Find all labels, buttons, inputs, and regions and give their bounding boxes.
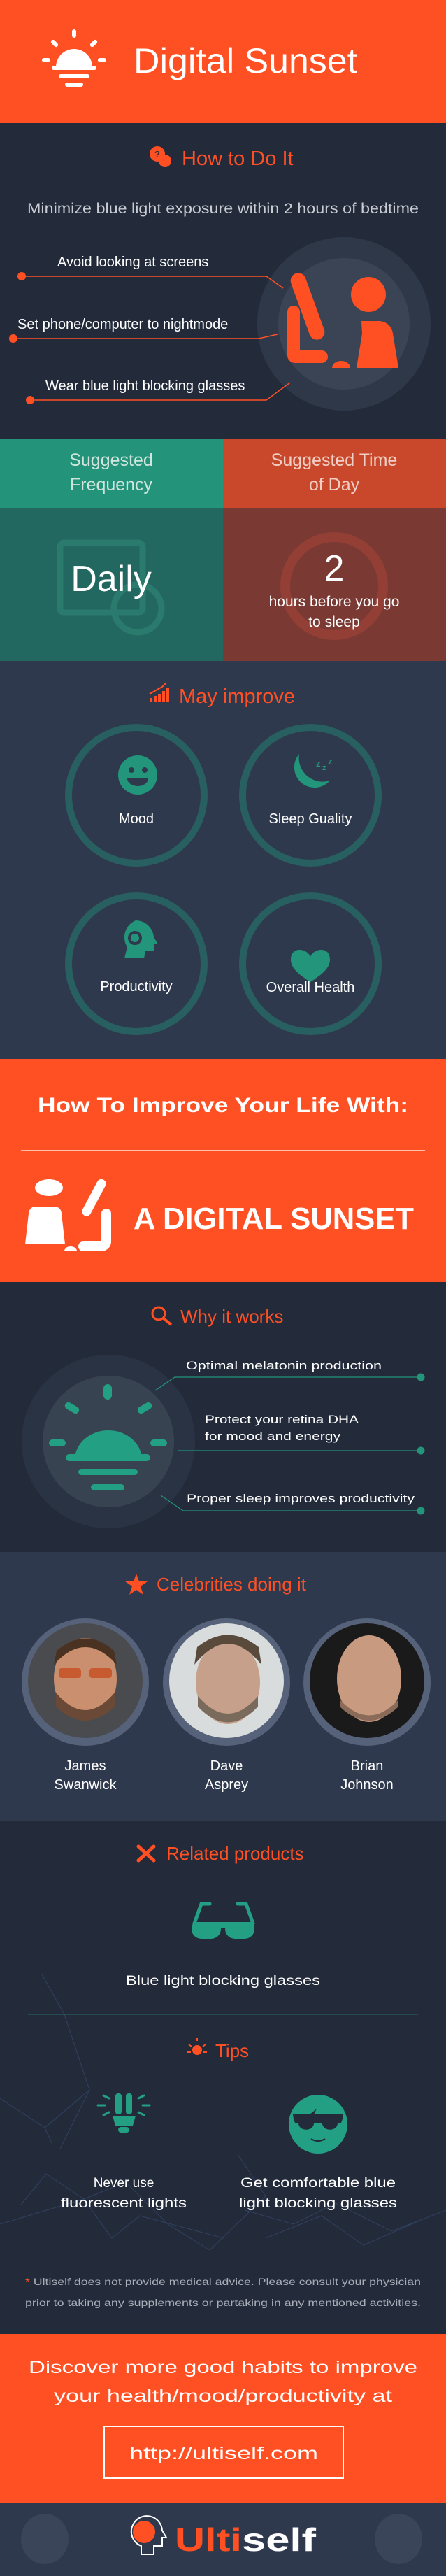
- heading: how to do it: How to Do It: [182, 148, 294, 170]
- url box: http://ultiself.com: [129, 2444, 318, 2463]
- benefit: overall health: Overall Health: [266, 980, 354, 995]
- list items: Wear blue light blocking glasses: [45, 378, 245, 394]
- logo: Ulti: [175, 2521, 242, 2558]
- url box: [104, 2426, 343, 2478]
- heading: celebrities: Celebrities doing it: [157, 1574, 307, 1595]
- celebrity: brian johnson: [303, 1618, 431, 1793]
- panel: suggested time of day: of Day: [309, 475, 360, 494]
- benefit: sleep quality: [243, 727, 378, 863]
- icon: teal sunset circle: [22, 1355, 195, 1528]
- panel: how to improve banner: How To Improve Your Life With:: [38, 1094, 408, 1117]
- panel: how to do it: [0, 123, 446, 439]
- title: Digital Sunset: [134, 41, 357, 80]
- list items: Set phone/computer to nightmode: [17, 317, 228, 332]
- panel: suggested frequency: [0, 439, 223, 661]
- list: reasons: for mood and energy: [205, 1430, 341, 1443]
- list items: Avoid looking at screens: [57, 255, 208, 270]
- benefit: productivity: Productivity: [100, 979, 173, 995]
- list: reasons: Proper sleep improves productivity: [187, 1492, 415, 1505]
- disclaimer: prior to taking any supplements or partaking in any mentioned activities.: [25, 2297, 421, 2308]
- heading: related products: Related products: [166, 1843, 304, 1864]
- celebrity: james swanwick: [22, 1618, 149, 1793]
- product: blue light glasses: Blue light blocking glasses: [126, 1974, 320, 1988]
- background network pattern: [0, 1974, 446, 2250]
- panel: why it works: [0, 1282, 446, 1552]
- tip: never use fluorescent lights: Never use: [94, 2176, 154, 2191]
- benefit: mood: [69, 727, 204, 863]
- celebrity: james swanwick: Swanwick: [55, 1777, 117, 1793]
- list: reasons: [155, 1359, 425, 1515]
- panel: how to improve banner: A DIGITAL SUNSET: [134, 1202, 414, 1236]
- disclaimer: [25, 2276, 421, 2308]
- celebrity: brian johnson: Brian: [351, 1758, 383, 1774]
- benefit: mood: Mood: [119, 811, 154, 827]
- celebrity: dave asprey: [163, 1618, 290, 1793]
- icon: faded clock: [285, 537, 383, 635]
- subtitle: Minimize blue light exposure within 2 hours of bedtime: [27, 201, 419, 217]
- panel: suggested frequency: Daily: [71, 559, 152, 599]
- header banner: [0, 0, 446, 123]
- icon: person and computer white: [25, 1178, 111, 1251]
- panel: how to improve banner: [0, 1059, 446, 1282]
- heading: may improve: May improve: [179, 685, 295, 708]
- benefit: sleep quality: z: [316, 758, 321, 769]
- heading: how to do it: ?: [154, 149, 160, 159]
- footer: [0, 2503, 446, 2576]
- list: reasons: Protect your retina DHA: [205, 1413, 359, 1426]
- benefit: overall health: [243, 896, 378, 1032]
- list items: [9, 255, 290, 404]
- list: reasons: Optimal melatonin production: [186, 1359, 382, 1372]
- panel: celebrities: [0, 1552, 446, 1821]
- panel: suggested frequency: Frequency: [70, 475, 153, 494]
- heading: why it works: Why it works: [180, 1306, 283, 1327]
- panel: suggested time of day: [223, 439, 446, 661]
- benefit: sleep quality: z: [322, 764, 326, 772]
- benefit: sleep quality: Sleep Guality: [269, 811, 352, 827]
- panel: call to action: Discover more good habits to improve: [29, 2358, 417, 2377]
- celebrity: dave asprey: Asprey: [205, 1777, 248, 1793]
- tip: comfortable glasses: light blocking glasses: [239, 2196, 397, 2211]
- tip: never use fluorescent lights: fluorescent lights: [61, 2196, 187, 2211]
- benefit: sleep quality: z: [328, 756, 333, 767]
- product: blue light glasses: [126, 1904, 320, 1988]
- panel: may improve: [0, 661, 446, 1059]
- panel: suggested time of day: hours before you go: [269, 594, 399, 610]
- panel: suggested time of day: 2: [324, 548, 344, 589]
- panel: suggested time of day: Suggested Time: [271, 450, 397, 470]
- celebrity: brian johnson: Johnson: [340, 1777, 394, 1793]
- celebrity: dave asprey: Dave: [210, 1758, 243, 1774]
- panel: call to action: [0, 2334, 446, 2503]
- tip: comfortable glasses: Get comfortable blue: [240, 2176, 396, 2191]
- celebrity: james swanwick: James: [65, 1758, 106, 1774]
- disclaimer: * Ultiself does not provide medical advice. Please consult your physician: [25, 2276, 421, 2287]
- icon: person at computer circle: [257, 237, 431, 411]
- icon: sunset: [42, 29, 106, 87]
- benefit: productivity: [69, 896, 204, 1032]
- logo: [131, 2516, 317, 2558]
- panel: suggested time of day: to sleep: [308, 614, 360, 630]
- heading: tips: Tips: [215, 2040, 249, 2061]
- panel: related products and tips: [0, 1821, 446, 2334]
- tip: comfortable glasses: [239, 2095, 397, 2211]
- panel: suggested frequency: Suggested: [69, 450, 153, 470]
- icon: faded calendar: [60, 543, 161, 632]
- tip: never use fluorescent lights: [61, 2093, 187, 2211]
- logo: self: [242, 2521, 317, 2558]
- heading: tips: [187, 2038, 249, 2061]
- panel: call to action: your health/mood/productivity at: [54, 2386, 392, 2406]
